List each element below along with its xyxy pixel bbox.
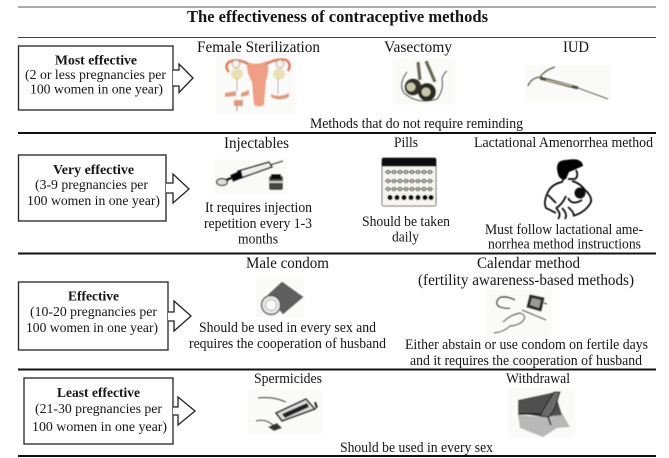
panel: least effective	[24, 371, 575, 456]
heading: pills: Pills	[394, 135, 418, 151]
text: injectables note: It requires injection	[205, 200, 312, 216]
label box: most effective: 100 women in one year)	[30, 82, 163, 98]
heading: male condom: Male condom	[246, 255, 329, 272]
panel: effective	[18, 255, 648, 369]
text: calendar note	[405, 337, 648, 369]
label box: effective	[18, 282, 168, 350]
text: lactational note: Must follow lactational ame-	[485, 222, 643, 238]
text: injectables note: months	[238, 232, 278, 248]
label box: most effective: (2 or less pregnancies per	[25, 68, 166, 83]
text: calendar note: Either abstain or use condom on fertile days	[405, 337, 648, 353]
text: condom note: requires the cooperation of husband	[189, 336, 386, 352]
label box: effective: 100 women in one year)	[26, 321, 158, 336]
label box: most effective: Most effective	[55, 54, 137, 68]
heading: injectables: Injectables	[224, 135, 289, 152]
icon: calendar method kit	[486, 289, 552, 337]
heading: spermicides: Spermicides	[254, 371, 322, 387]
text: lactational note	[485, 222, 643, 252]
text: pills note: Should be taken	[362, 214, 450, 230]
text: pills note: daily	[392, 230, 420, 246]
label box: effective: Effective	[68, 290, 119, 304]
icon: condom packet	[255, 277, 305, 318]
icon: breastfeeding mother	[545, 159, 591, 219]
text: pills note	[362, 214, 450, 246]
arrow: very effective	[166, 174, 189, 203]
label box: very effective	[18, 155, 166, 221]
label box: least effective: (21-30 pregnancies per	[35, 402, 162, 417]
caption: no reminding: Methods that do not require reminding	[310, 116, 523, 132]
text: injectables note: repetition every 1-3	[204, 216, 312, 232]
arrow: most effective	[173, 64, 193, 92]
text: condom note: Should be used in every sex and	[199, 320, 376, 336]
heading: calendar method: (fertility awareness-based methods)	[418, 272, 634, 289]
label box: very effective: 100 women in one year)	[27, 194, 160, 209]
text: calendar note: and it requires the cooperation of husband	[410, 353, 642, 369]
icon: withdrawal	[508, 388, 575, 438]
caption: every sex: Should be used in every sex	[340, 440, 493, 456]
icon: pill pack	[382, 158, 436, 206]
label box: effective: (10-20 pregnancies per	[30, 305, 157, 320]
heading: female sterilization: Female Sterilization	[197, 39, 320, 56]
arrow: effective	[168, 301, 191, 331]
label box: very effective: (3-9 pregnancies per	[35, 178, 148, 193]
label box: very effective: Very effective	[53, 163, 134, 178]
heading: vasectomy: Vasectomy	[384, 39, 452, 56]
title: The effectiveness of contraceptive methods	[187, 7, 488, 26]
label box: least effective	[24, 378, 173, 444]
heading: calendar method: Calendar method	[477, 255, 580, 272]
text: injectables note	[204, 200, 312, 248]
label box: least effective: 100 women in one year)	[32, 420, 167, 435]
text: lactational note: norrhea method instructions	[488, 236, 641, 252]
icon: female reproductive system	[215, 55, 296, 114]
icon: vasectomy	[392, 58, 456, 105]
icon: syringe and vial	[214, 159, 288, 194]
heading: calendar method	[418, 255, 634, 289]
icon: spermicide tube	[247, 390, 323, 434]
label box: least effective: Least effective	[57, 386, 140, 401]
heading: withdrawal: Withdrawal	[506, 371, 570, 387]
icon: IUD	[525, 65, 611, 101]
text: condom note	[189, 320, 386, 352]
panel: very effective	[18, 135, 653, 252]
heading: lactational amenorrhea: Lactational Amenorrhea method	[474, 135, 653, 151]
panel: most effective	[18, 39, 611, 132]
heading: IUD: IUD	[563, 39, 589, 56]
arrow: least effective	[173, 397, 195, 425]
label box: most effective	[18, 46, 173, 110]
